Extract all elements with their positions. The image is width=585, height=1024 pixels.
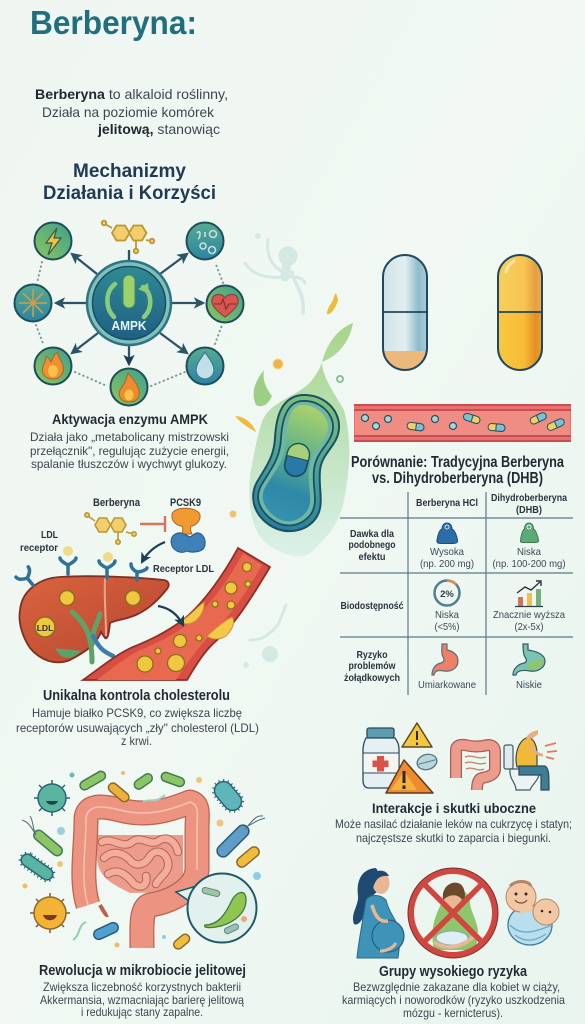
PCSK9 protein xyxy=(171,508,205,552)
sun microbe xyxy=(30,893,70,933)
particles xyxy=(22,771,261,948)
row: dose: Dawka dla xyxy=(350,528,394,540)
row: stomach problems: Umiarkowane xyxy=(418,679,476,691)
arrow to receptor xyxy=(142,542,165,562)
row: dose: Wysoka xyxy=(430,546,464,558)
heading: mechanisms: Mechanizmy xyxy=(73,161,186,182)
text block: cholesterol xyxy=(16,688,259,748)
text block: cholesterol: receptorów usuwających „zły" cholesterol (LDL) xyxy=(16,721,259,735)
text block: cholesterol: z krwi. xyxy=(121,734,152,748)
icon: molecule xyxy=(102,221,154,253)
text block: cholesterol: Hamuje białko PCSK9, co zwiększa liczbę xyxy=(32,706,242,720)
virus microbe xyxy=(34,780,70,816)
intro text: Berberyna to alkaloid roślinny, xyxy=(35,86,228,102)
text block: high risk: karmiących i noworodków (ryzyko uszkodzenia xyxy=(342,993,565,1007)
green blob and leaves xyxy=(249,323,353,556)
leaf xyxy=(254,370,272,406)
labels: receptor xyxy=(20,542,58,554)
prohibited breastfeeding xyxy=(408,868,498,958)
intro text xyxy=(35,86,228,137)
arrow to artery xyxy=(158,606,183,625)
row: dose xyxy=(348,523,566,570)
panel: high risk groups icons xyxy=(353,868,559,958)
row: bioavailability: (2x-5x) xyxy=(514,621,544,633)
icon: AMPK hub: AMPK xyxy=(112,318,147,333)
row: stomach problems: Ryzyko xyxy=(356,649,388,661)
row: bioavailability: Znacznie wyższa xyxy=(493,609,565,621)
row: dose: efektu xyxy=(358,551,386,563)
decorative ghost figure xyxy=(245,233,305,313)
row: stomach problems: żołądkowych xyxy=(344,672,400,684)
warning small xyxy=(402,723,432,747)
icon: heart xyxy=(206,286,244,322)
labels xyxy=(20,497,215,575)
heading: mechanisms: Działania i Korzyści xyxy=(43,183,216,204)
row: stomach problems: Niskie xyxy=(516,679,542,691)
text block: AMPK: Aktywacja enzymu AMPK xyxy=(52,411,208,427)
text block: microbiome: Zwiększa liczebność korzystnych bakterii xyxy=(43,980,241,994)
icon: flame bottom xyxy=(110,368,148,406)
warning large xyxy=(386,760,433,793)
table header: Dihydroberberyna xyxy=(491,492,567,504)
text block: AMPK: Działa jako „metabolicany mistrzowski xyxy=(30,430,229,444)
row: dose: (np. 200 mg) xyxy=(420,558,474,570)
row: stomach problems xyxy=(344,644,545,691)
decorative ghost lower xyxy=(243,605,286,668)
labels: Berberyna xyxy=(93,497,141,509)
heading: comparison: vs. Dihydroberberyna (DHB) xyxy=(372,470,543,487)
text block: AMPK: przełącznik", regulując zużycie energii, xyxy=(30,444,229,458)
icon: fire left xyxy=(34,348,72,384)
icon: AMPK hub xyxy=(87,261,171,345)
text block: high risk xyxy=(342,964,565,1020)
title: Berberyna: xyxy=(30,4,197,41)
molecule xyxy=(85,513,136,544)
large intestine xyxy=(84,802,197,948)
inhibition line xyxy=(140,516,165,532)
heading: mechanisms xyxy=(43,161,216,204)
table header xyxy=(416,492,567,516)
row: bioavailability: 2% xyxy=(440,589,454,600)
row: bioavailability: Niska xyxy=(435,609,459,621)
row: stomach problems: problemów xyxy=(348,660,396,672)
panel: central capsule illustration xyxy=(230,323,353,556)
intro text: Działa na poziomie komórek xyxy=(42,104,215,120)
panel: comparison table xyxy=(340,492,573,695)
text block: high risk: Grupy wysokiego ryzyka xyxy=(379,964,528,980)
heading: comparison xyxy=(351,454,564,487)
inner capsule xyxy=(282,441,312,479)
panel: gut microbiome xyxy=(19,770,265,951)
liver xyxy=(19,576,169,662)
panel: cholesterol diagram xyxy=(16,497,270,680)
text block: interactions: Interakcje i skutki uboczne xyxy=(372,800,536,816)
pill xyxy=(415,752,439,772)
row: bioavailability: Biodostępność xyxy=(340,600,404,612)
text block: microbiome: Rewolucja w mikrobiocie jelitowej xyxy=(39,962,246,979)
icon: fat cells xyxy=(14,284,52,322)
receptors xyxy=(16,558,147,590)
text block: AMPK xyxy=(30,411,229,471)
row: dose: podobnego xyxy=(348,539,396,551)
icon: energy bolt xyxy=(34,222,72,260)
labels: LDL xyxy=(41,529,58,541)
text block: AMPK: spalanie tłuszczów i wychwyt glukozy. xyxy=(31,457,227,471)
text block: microbiome: Akkermansia, wzmacniając barierę jelitową xyxy=(40,993,244,1007)
medicine bottle xyxy=(363,728,399,788)
text block: cholesterol: Unikalna kontrola cholesterolu xyxy=(43,688,230,704)
capsule body xyxy=(253,395,339,531)
table header: Berberyna HCl xyxy=(416,497,478,509)
text block: microbiome xyxy=(39,962,246,1019)
panel: cholesterol diagram: LDL xyxy=(37,623,53,633)
magnifier callout xyxy=(176,874,256,942)
decorative leaf accents xyxy=(235,294,338,432)
icon: traditional capsule xyxy=(383,255,427,370)
babies xyxy=(506,882,559,945)
bile ducts xyxy=(72,612,100,662)
artery xyxy=(83,548,270,680)
row: dose: Niska xyxy=(517,546,541,558)
table header: (DHB) xyxy=(516,504,542,516)
icon: water drop xyxy=(186,348,224,384)
text block: high risk: Bezwzględnie zakazane dla kobiet w ciąży, xyxy=(353,980,560,994)
small intestine xyxy=(97,835,183,893)
LDL particles xyxy=(35,546,140,637)
droplets xyxy=(273,359,283,369)
panel: blood vessel with molecules xyxy=(354,404,571,442)
labels: PCSK9 xyxy=(170,497,201,509)
text block: microbiome: i redukując stany zapalne. xyxy=(81,1005,203,1019)
text block: high risk: mózgu - kernicterus). xyxy=(403,1006,503,1020)
panel: interactions icons xyxy=(363,723,557,793)
icon: molecules xyxy=(186,222,224,260)
pregnant woman xyxy=(353,868,404,958)
labels: Receptor LDL xyxy=(153,563,215,575)
row: bioavailability: (<5%) xyxy=(434,621,460,633)
text block: interactions: najczęstsze skutki to zaparcia i biegunki. xyxy=(356,831,551,845)
bacteria xyxy=(19,770,265,951)
text block: interactions xyxy=(335,800,572,845)
panel: AMPK diagram xyxy=(14,221,244,406)
intestine xyxy=(456,745,495,790)
icon: DHB capsule xyxy=(498,255,542,370)
person on toilet xyxy=(504,730,557,790)
row: dose: (np. 100-200 mg) xyxy=(492,558,566,570)
intro text: jelitową, stanowiąc xyxy=(97,121,220,137)
row: bioavailability xyxy=(340,580,565,633)
